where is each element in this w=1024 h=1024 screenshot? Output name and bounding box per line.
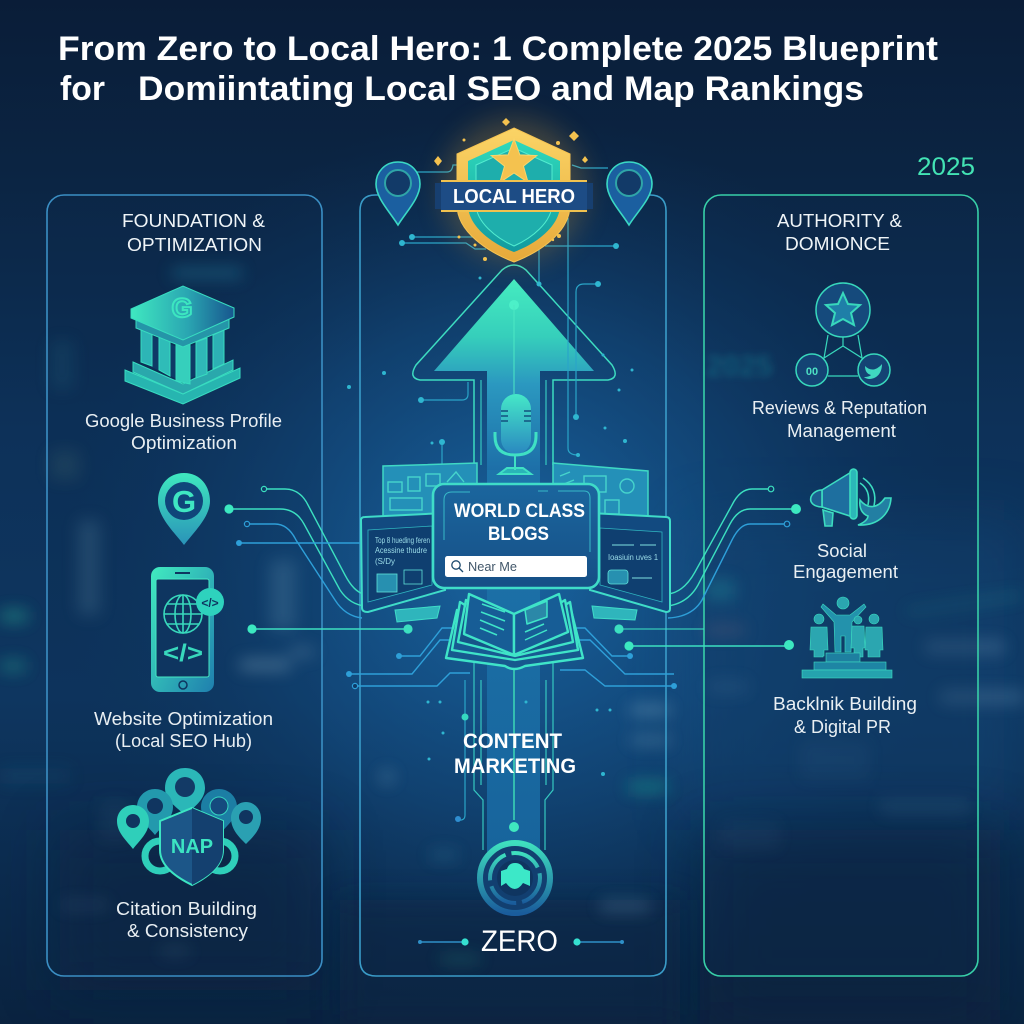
title: Domiintating Local SEO and Map Rankings <box>138 70 864 108</box>
label: social engagement: Social <box>817 541 867 561</box>
panel: centre column frame <box>360 195 666 976</box>
screen: right monitor: Ioasiuin uves 1 <box>608 553 659 562</box>
circuit dots: around the arrow <box>347 234 634 822</box>
shaft: glowing column <box>487 380 540 855</box>
icon: google map pin <box>158 473 210 545</box>
card: world class blogs: WORLD CLASS <box>454 500 585 522</box>
label: reviews and reputation: Reviews & Reputation <box>752 398 927 418</box>
label: citation building: & Consistency <box>127 921 248 941</box>
icon: microphone <box>495 394 536 474</box>
background: 2025 <box>706 350 773 383</box>
search bar: Near Me <box>468 559 517 574</box>
right panel heading <box>777 211 902 254</box>
card: world class blogs <box>433 484 599 588</box>
screen: left monitor: (S/Dy <box>375 557 395 566</box>
search bar <box>445 556 587 577</box>
left panel heading: OPTIMIZATION <box>127 235 262 255</box>
icon: google business building: G <box>171 293 193 323</box>
label: google business profile <box>85 411 282 453</box>
screen: left monitor: Top 8 hueding feren <box>375 536 430 545</box>
icon: open book <box>446 594 583 669</box>
card: world class blogs: BLOGS <box>488 523 549 545</box>
star <box>491 139 537 182</box>
icon: right map pin <box>607 162 652 225</box>
title: for <box>60 70 105 108</box>
icon: google business building <box>125 286 240 404</box>
sparkles <box>434 118 588 261</box>
label: zero: ZERO <box>481 925 558 958</box>
title: From Zero to Local Hero: 1 Complete 2025 Blueprint <box>58 30 938 68</box>
label: citation building <box>116 899 257 941</box>
label: citation building: Citation Building <box>116 899 257 919</box>
arrow <box>413 265 615 850</box>
panel: authority and dominance <box>704 195 978 976</box>
banner: local hero <box>435 181 593 211</box>
title <box>58 30 938 108</box>
screen: back right <box>553 463 648 520</box>
icon: shield badge with star <box>434 118 588 262</box>
heading: content marketing <box>454 730 576 778</box>
panel: foundation and optimization <box>47 195 322 976</box>
icon: megaphone with bird <box>811 469 891 526</box>
icon: smartphone with globe <box>151 567 224 692</box>
icon: reviews network <box>796 283 890 386</box>
label: reviews and reputation <box>752 398 927 441</box>
label: backlink building <box>773 694 917 737</box>
icon: people on podium <box>802 597 892 678</box>
icon: left map pin <box>376 162 420 225</box>
icon: reviews network: 00 <box>806 366 818 378</box>
icon: google map pin: G <box>172 484 196 519</box>
circuit dots: right side <box>614 486 801 689</box>
label: backlink building: Backlnik Building <box>773 694 917 714</box>
heading: content marketing: MARKETING <box>454 755 576 778</box>
label: social engagement <box>793 541 898 582</box>
left panel heading <box>122 211 265 255</box>
circuit lines: right side <box>560 489 796 686</box>
label: reviews and reputation: Management <box>787 421 896 441</box>
icon: smartphone with globe: </> <box>163 640 203 667</box>
year label: 2025 <box>917 153 975 181</box>
icon: zero target <box>477 840 553 916</box>
circuit lines: around the arrow <box>402 165 616 820</box>
label: social engagement: Engagement <box>793 562 898 582</box>
label: zero <box>418 925 624 958</box>
right panel heading: AUTHORITY & <box>777 211 902 231</box>
label: backlink building: & Digital PR <box>794 717 891 737</box>
icon: NAP shield with pins: NAP <box>171 836 213 858</box>
screen: back left <box>383 463 477 520</box>
circuit dots: left side <box>224 486 413 689</box>
left panel heading: FOUNDATION & <box>122 211 265 231</box>
screen: right monitor <box>590 513 670 620</box>
banner: local hero: LOCAL HERO <box>453 186 575 208</box>
screen: left monitor <box>361 513 445 622</box>
label: website optimization <box>94 709 273 751</box>
icon: smartphone with globe: </> <box>201 596 219 610</box>
icon: NAP shield with pins <box>117 768 261 885</box>
heading: content marketing: CONTENT <box>463 730 562 753</box>
screen: left monitor: Acessine thudre <box>375 546 427 555</box>
label: website optimization: Website Optimization <box>94 709 273 729</box>
label: google business profile: Google Business Profile <box>85 411 282 431</box>
circuit lines: left side <box>229 489 470 686</box>
label: website optimization: (Local SEO Hub) <box>115 731 252 751</box>
right panel heading: DOMIONCE <box>785 234 890 254</box>
label: google business profile: Optimization <box>131 433 237 453</box>
